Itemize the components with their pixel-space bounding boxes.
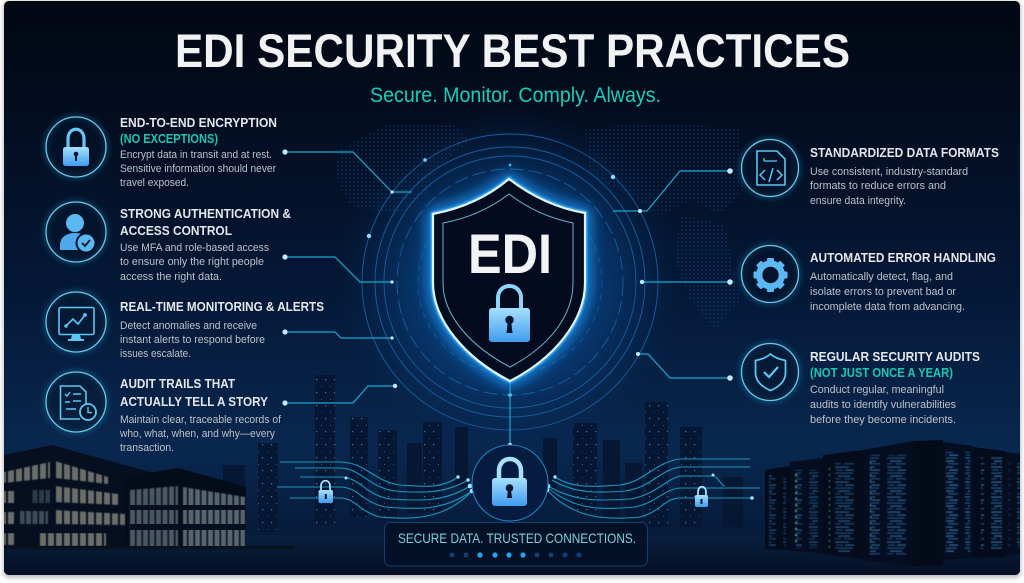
icon: padlock xyxy=(46,117,106,177)
item: end-to-end encryption: Sensitive information should never xyxy=(120,163,276,175)
world map dots xyxy=(335,122,745,330)
item: regular security audits: Conduct regular, meaningful xyxy=(810,384,944,396)
item: audit trails: who, what, when, and why—every xyxy=(119,428,276,440)
item: audit trails: AUDIT TRAILS THAT xyxy=(120,377,235,391)
item: real-time monitoring: Detect anomalies and receive xyxy=(120,320,257,332)
item: regular security audits: (NOT JUST ONCE A YEAR) xyxy=(810,366,953,380)
banner progress dots xyxy=(450,552,582,558)
server racks xyxy=(765,440,1020,566)
item: automated error handling: Automatically detect, flag, and xyxy=(810,271,953,283)
item: automated error handling: AUTOMATED ERROR HANDLING xyxy=(810,251,996,265)
item: real-time monitoring xyxy=(120,300,324,360)
item: standardized data formats: STANDARDIZED DATA FORMATS xyxy=(810,146,999,160)
item: end-to-end encryption: END-TO-END ENCRYPTION xyxy=(120,116,277,130)
subtitle: Secure. Monitor. Comply. Always. xyxy=(370,84,661,107)
item: strong authentication: access the right data. xyxy=(120,271,222,283)
small lock left xyxy=(318,481,333,503)
item: strong authentication: to ensure only the right people xyxy=(120,256,264,268)
ground xyxy=(4,570,1020,575)
item: real-time monitoring: issues escalate. xyxy=(120,348,191,360)
item: strong authentication: STRONG AUTHENTICATION & xyxy=(120,207,291,221)
icon: monitor chart xyxy=(46,292,106,352)
item: standardized data formats: Use consistent, industry-standard xyxy=(810,166,968,178)
icon: audit document with clock xyxy=(46,372,106,432)
item: strong authentication: ACCESS CONTROL xyxy=(120,224,232,238)
item: strong authentication: Use MFA and role-based access xyxy=(120,242,269,254)
title: EDI SECURITY BEST PRACTICES xyxy=(175,24,850,77)
shield lock xyxy=(489,286,530,342)
item: end-to-end encryption: travel exposed. xyxy=(120,177,189,189)
item: automated error handling xyxy=(810,251,996,313)
item: standardized data formats xyxy=(810,146,999,207)
small lock right xyxy=(695,487,708,507)
item: audit trails: transaction. xyxy=(120,442,174,454)
icon: gear xyxy=(742,246,798,302)
item: audit trails xyxy=(119,377,281,454)
city skyline xyxy=(223,375,743,535)
item: strong authentication xyxy=(120,207,291,283)
item: end-to-end encryption: Encrypt data in transit and at rest. xyxy=(120,149,272,161)
item: regular security audits: REGULAR SECURITY AUDITS xyxy=(810,350,980,364)
banner xyxy=(384,522,648,566)
item: regular security audits xyxy=(810,350,980,426)
icon: shield check xyxy=(742,344,798,400)
connector lines xyxy=(282,149,733,447)
item: standardized data formats: formats to reduce errors and xyxy=(810,180,946,192)
rings around shield xyxy=(362,134,658,430)
item: real-time monitoring: instant alerts to respond before xyxy=(120,334,265,346)
item: audit trails: Maintain clear, traceable records of xyxy=(120,414,281,426)
item: automated error handling: isolate errors to prevent bad or xyxy=(810,286,956,298)
shield label EDI: EDI xyxy=(468,222,552,285)
bottom lock hub xyxy=(472,445,548,521)
icon: data format document xyxy=(742,140,798,196)
icon: verified user xyxy=(46,202,106,262)
item: audit trails: ACTUALLY TELL A STORY xyxy=(120,395,269,409)
item: automated error handling: incomplete data from advancing. xyxy=(810,301,965,313)
item: regular security audits: before they become incidents. xyxy=(810,414,956,426)
banner: SECURE DATA. TRUSTED CONNECTIONS. xyxy=(398,531,636,546)
item: real-time monitoring: REAL-TIME MONITORING & ALERTS xyxy=(120,300,324,314)
office building xyxy=(4,445,294,549)
central shield xyxy=(433,179,585,381)
item: standardized data formats: ensure data integrity. xyxy=(810,195,906,207)
bottom data wires xyxy=(277,459,760,518)
item: regular security audits: audits to identify vulnerabilities xyxy=(810,399,956,411)
item: end-to-end encryption xyxy=(120,116,277,189)
item: end-to-end encryption: (NO EXCEPTIONS) xyxy=(120,132,218,146)
